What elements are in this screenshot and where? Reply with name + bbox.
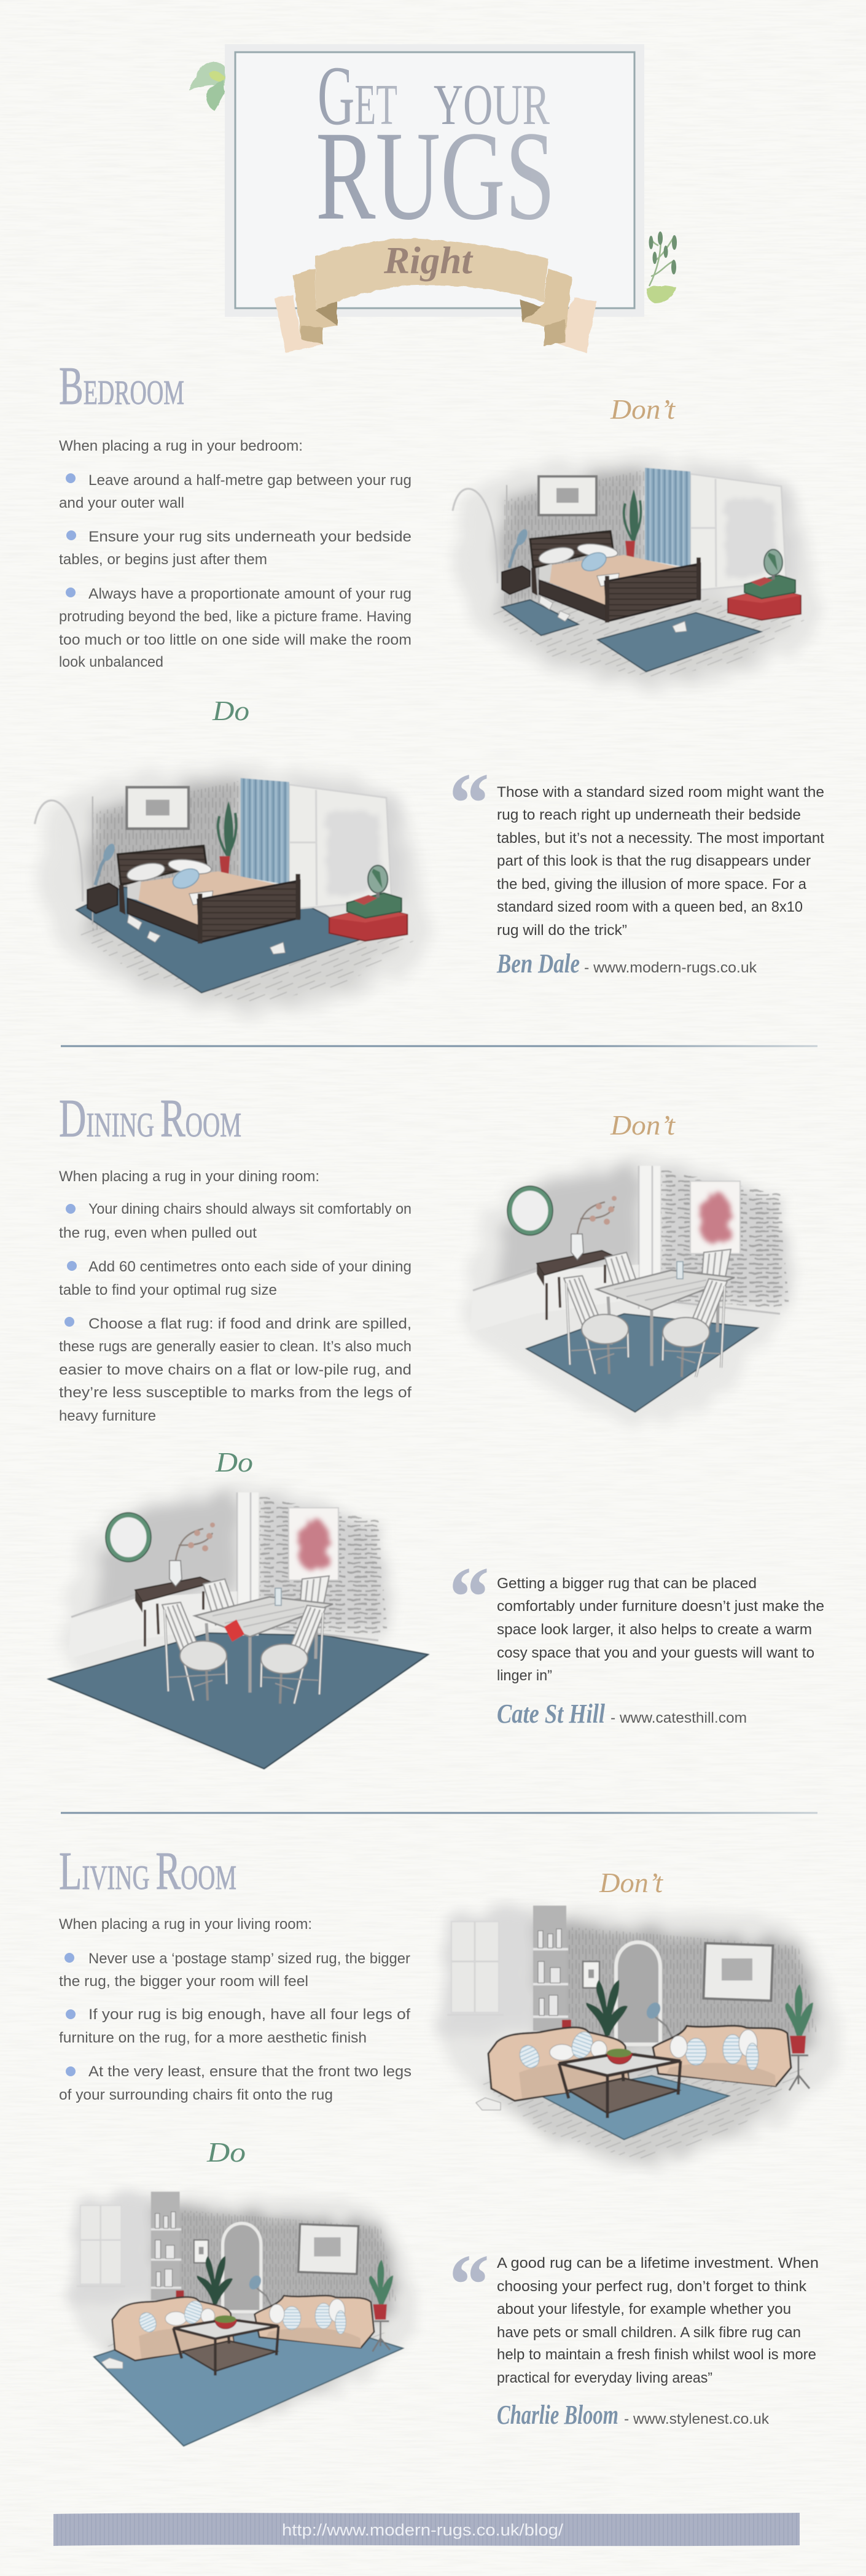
quote: bedroom: the bed, giving the illusion of more space. For a [497, 876, 807, 893]
living tips: the rug, the bigger your room will feel [59, 1973, 308, 1990]
attribution: ben dale: Ben Dale [496, 949, 580, 979]
bedroom tips: protruding beyond the bed, like a picture frame. Having [59, 608, 412, 625]
bedroom tips: too much or too little on one side will make the room [59, 632, 412, 648]
panel: bedroom [35, 357, 824, 1015]
rug [541, 2076, 729, 2140]
quote: bedroom: part of this look is that the rug disappears under [497, 853, 811, 869]
illustration: bedroom don't [453, 457, 816, 689]
illustration: living do [71, 2192, 415, 2446]
bedroom tips [59, 438, 412, 670]
label: do: Do [212, 695, 249, 726]
illustration: bedroom do [35, 767, 427, 1015]
panel: living room [59, 1842, 839, 2446]
title: get your: YOUR [434, 73, 550, 137]
quote: dining [445, 1550, 824, 1729]
bullet dot [66, 2009, 76, 2019]
footer url: http://www.modern-rugs.co.uk/blog/ [282, 2521, 564, 2539]
rug [526, 1314, 758, 1412]
bedroom tips: tables, or begins just after them [59, 551, 267, 568]
quote: bedroom [445, 756, 824, 979]
dining tips: Add 60 centimetres onto each side of your dining [88, 1259, 412, 1275]
ribbon text: right: Right [383, 240, 474, 282]
attribution: cate st hill: Cate St Hill [497, 1699, 606, 1729]
living tips: of your surrounding chairs fit onto the rug [59, 2087, 333, 2103]
dining tips [59, 1168, 412, 1424]
title frame [225, 44, 644, 317]
dining tips: they’re less susceptible to marks from the legs of [59, 1384, 412, 1401]
quote: dining: - www.catesthill.com [610, 1710, 747, 1726]
title: get your: GET [318, 48, 397, 142]
rug: large [598, 613, 761, 672]
bullet dot [66, 530, 76, 540]
dining tips: easier to move chairs on a flat or low-pile rug, and [59, 1362, 412, 1378]
heading: dining room: DINING ROOM [59, 1089, 241, 1149]
bullet dot [67, 1261, 77, 1271]
living tips: If your rug is big enough, have all four legs of [88, 2006, 410, 2023]
bedroom tips: When placing a rug in your bedroom: [59, 438, 303, 454]
dining tips: heavy furniture [59, 1408, 156, 1424]
ribbon banner [275, 239, 596, 353]
label: do: Do [215, 1446, 253, 1478]
dining tips: table to find your optimal rug size [59, 1282, 277, 1298]
bedroom tips: look unbalanced [59, 654, 163, 670]
label: don't: Don’t [599, 1867, 663, 1898]
quote: dining: linger in” [497, 1667, 552, 1684]
divider [61, 1812, 817, 1814]
icon: quote mark: “ [445, 756, 488, 851]
bedroom tips: Leave around a half-metre gap between your rug [88, 472, 412, 489]
living tips: When placing a rug in your living room: [59, 1916, 312, 1933]
title: get your [318, 48, 550, 142]
living tips [59, 1916, 412, 2103]
bullet dot [66, 1204, 76, 1214]
label: don't: Don’t [610, 1109, 676, 1141]
bullet dot [66, 473, 76, 483]
dining tips: Your dining chairs should always sit comfortably on [88, 1201, 412, 1217]
quote: dining: cosy space that you and your guests will want to [497, 1645, 814, 1661]
bedroom tips: Always have a proportionate amount of your rug [88, 586, 412, 602]
quote: living: choosing your perfect rug, don’t forget to think [497, 2278, 807, 2295]
icon: quote mark: “ [445, 2237, 488, 2332]
quote: dining: space look larger, it also helps to create a warm [497, 1621, 812, 1638]
rug: small [502, 600, 579, 635]
quote: dining: Getting a bigger rug that can be placed [497, 1575, 757, 1592]
quote: living: help to maintain a fresh finish whilst wool is more [497, 2346, 816, 2363]
panel: dining room [49, 1089, 824, 1769]
quote: living: - www.stylenest.co.uk [624, 2411, 770, 2427]
illustration: living don't [440, 1906, 839, 2170]
heading: living room: LIVING ROOM [59, 1842, 236, 1901]
dining tips: Choose a flat rug: if food and drink are spilled, [88, 1316, 412, 1332]
rug [49, 1633, 428, 1769]
bullet dot [64, 1317, 74, 1327]
quote: dining: comfortably under furniture doesn’t just make the [497, 1598, 824, 1615]
rug [94, 2327, 403, 2446]
icon: quote mark: “ [445, 1550, 488, 1645]
quote: bedroom: rug to reach right up underneath their bedside [497, 807, 801, 823]
book on table [224, 1620, 244, 1642]
quote: bedroom: - www.modern-rugs.co.uk [584, 960, 757, 976]
quote: living: have pets or small children. A silk fibre rug can [497, 2324, 801, 2341]
dining tips: the rug, even when pulled out [59, 1225, 257, 1241]
bedroom tips: Ensure your rug sits underneath your bedside [88, 529, 412, 545]
icon: left leaves [188, 62, 225, 111]
quote: bedroom: rug will do the trick” [497, 922, 627, 939]
title panel [188, 44, 677, 353]
quote: living [445, 2237, 819, 2430]
dining tips: When placing a rug in your dining room: [59, 1168, 319, 1185]
illustration: dining don't [466, 1157, 796, 1427]
bullet dot [66, 588, 76, 597]
living tips: At the very least, ensure that the front two legs [88, 2063, 412, 2080]
illustration: dining do [49, 1484, 428, 1769]
quote: living: practical for everyday living areas” [497, 2370, 712, 2386]
quote: bedroom: Those with a standard sized room might want the [497, 784, 824, 801]
bedroom tips: and your outer wall [59, 495, 184, 511]
living tips: furniture on the rug, for a more aesthetic finish [59, 2030, 367, 2046]
attribution: charlie bloom: Charlie Bloom [497, 2400, 618, 2430]
label: don't: Don’t [610, 394, 676, 425]
bullet dot [66, 2066, 76, 2076]
footer bar [53, 2513, 800, 2546]
rug: large under bed [76, 887, 359, 993]
quote: living: about your lifestyle, for example whether you [497, 2301, 791, 2318]
divider [61, 1046, 817, 1047]
dining tips: these rugs are generally easier to clean. It’s also much [59, 1338, 412, 1355]
quote: bedroom: standard sized room with a queen bed, an 8x10 [497, 899, 803, 915]
heading: bedroom: BEDROOM [59, 357, 184, 416]
label: do: Do [206, 2136, 246, 2168]
quote: bedroom: tables, but it’s not a necessity. The most important [497, 830, 824, 847]
bullet dot [64, 1953, 74, 1963]
living tips: Never use a ‘postage stamp’ sized rug, the bigger [88, 1950, 410, 1967]
title: rugs: RUGS [316, 105, 555, 246]
icon: right sprig [646, 231, 677, 303]
quote: living: A good rug can be a lifetime investment. When [497, 2255, 819, 2271]
